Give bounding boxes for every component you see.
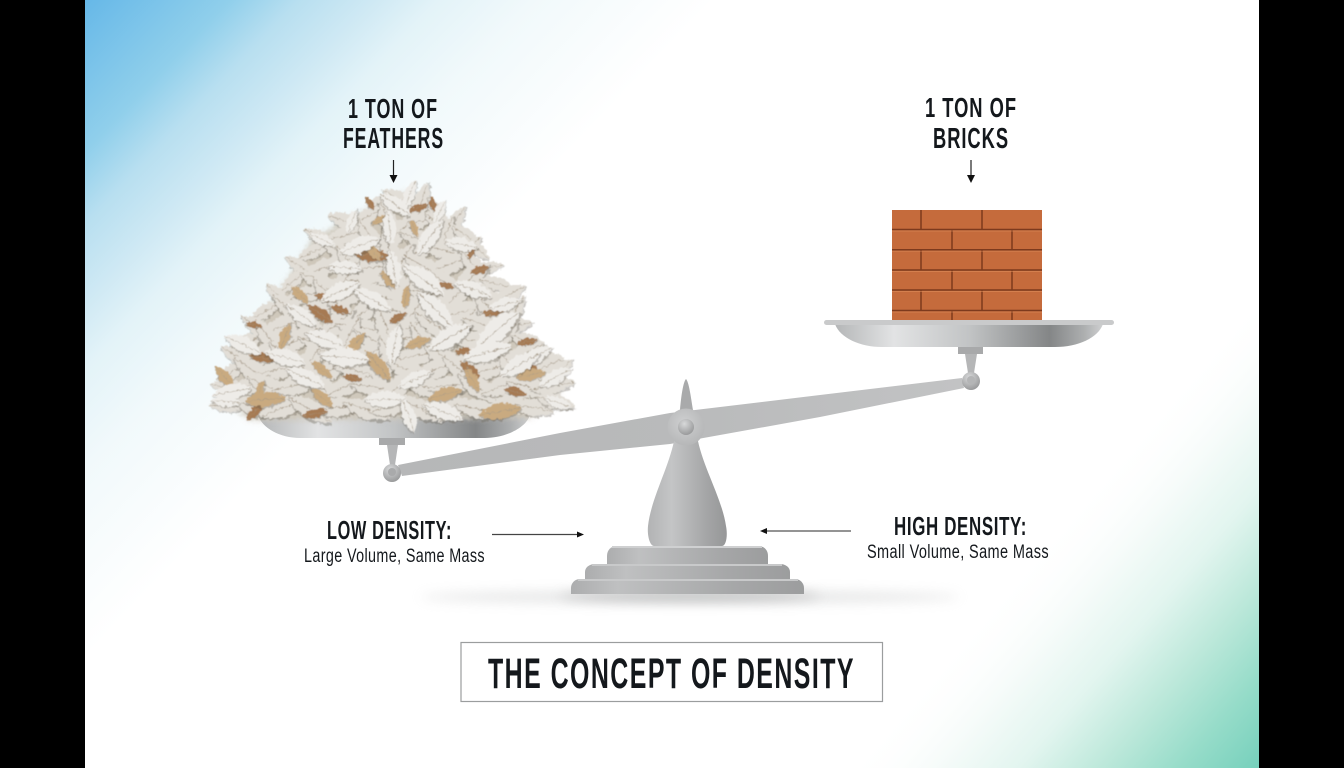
brick stack [892,210,1042,320]
callout: low density [304,515,485,567]
callout: low density: LOW DENSITY: [327,515,452,545]
feather pile [208,178,579,436]
heading: 1 ton of feathers: 1 TON OF [348,93,438,124]
callout: high density: Small Volume, Same Mass [867,542,1049,563]
right pan [824,320,1114,390]
stepped base [571,546,804,594]
heading: 1 ton of bricks: 1 TON OF [925,92,1017,123]
callout: low density: Large Volume, Same Mass [304,546,485,567]
base layer of feathers [208,180,579,433]
pivot [668,408,704,446]
left pan [258,415,530,482]
heading: 1 ton of bricks: BRICKS [933,123,1009,155]
title box [461,642,882,702]
heading: 1 ton of feathers: FEATHERS [343,123,444,155]
balance scale [258,320,1114,594]
brown feathers [243,195,539,424]
arrow: down to bricks [967,160,975,183]
spike [680,379,693,410]
heading: 1 ton of feathers [343,93,444,155]
column [648,436,727,546]
heading: 1 ton of bricks [925,92,1017,155]
beam [398,378,964,476]
arrow: down to feathers [390,160,398,183]
arrow: high density to column [760,528,851,534]
callout: high density: HIGH DENSITY: [894,511,1027,541]
arrow: low density to column [492,532,584,538]
white top feathers [210,178,577,436]
ground shadow [420,591,960,603]
title box: THE CONCEPT OF DENSITY [488,650,855,698]
callout: high density [867,511,1049,563]
tan feathers [210,212,547,425]
